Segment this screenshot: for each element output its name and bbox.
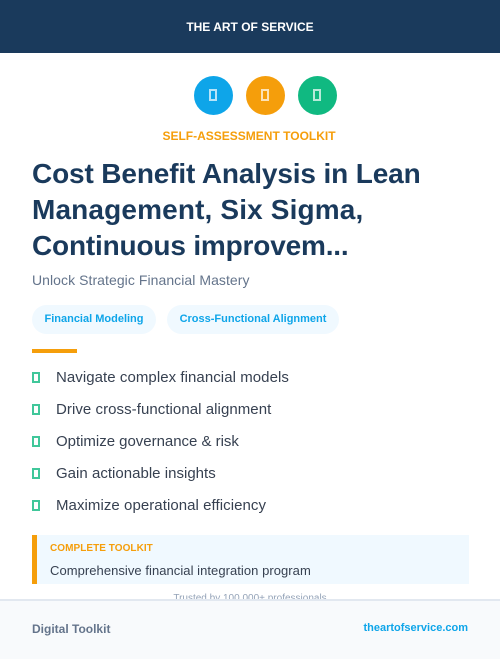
pill: financial modeling (32, 305, 156, 334)
footer link: theartofservice.com (363, 622, 468, 634)
accent divider (32, 349, 77, 353)
list item 2: Drive cross-functional alignment (56, 401, 271, 418)
eyebrow label: SELF-ASSESSMENT TOOLKIT (162, 129, 336, 143)
title: Management, Six Sigma, (32, 194, 363, 225)
pill: cross-functional alignment: Cross-Functional Alignment (180, 313, 326, 325)
title (32, 158, 421, 261)
callout label: COMPLETE TOOLKIT (50, 543, 153, 554)
icon row (194, 76, 337, 115)
trust line: Trusted by 100,000+ professionals (173, 593, 327, 604)
benefits list (32, 369, 289, 514)
title: Continuous improvem... (32, 230, 348, 261)
list item 5: Maximize operational efficiency (56, 497, 266, 514)
subtitle: Unlock Strategic Financial Mastery (32, 272, 250, 288)
pill: financial modeling: Financial Modeling (44, 313, 144, 325)
callout panel (32, 535, 469, 584)
icon: orange circle (246, 76, 285, 115)
icon: green circle (298, 76, 337, 115)
list item 4: Gain actionable insights (56, 465, 216, 482)
title: Cost Benefit Analysis in Lean (32, 158, 421, 189)
footer left label: Digital Toolkit (32, 622, 110, 636)
footer (0, 599, 500, 659)
tag pills (32, 305, 339, 334)
list item 3: Optimize governance & risk (56, 433, 239, 450)
icon: blue circle (194, 76, 233, 115)
pill: cross-functional alignment (167, 305, 339, 334)
list item 1: Navigate complex financial models (56, 369, 289, 386)
header band: THE ART OF SERVICE (186, 20, 314, 34)
header band (0, 0, 500, 53)
callout text: Comprehensive financial integration program (50, 563, 311, 578)
